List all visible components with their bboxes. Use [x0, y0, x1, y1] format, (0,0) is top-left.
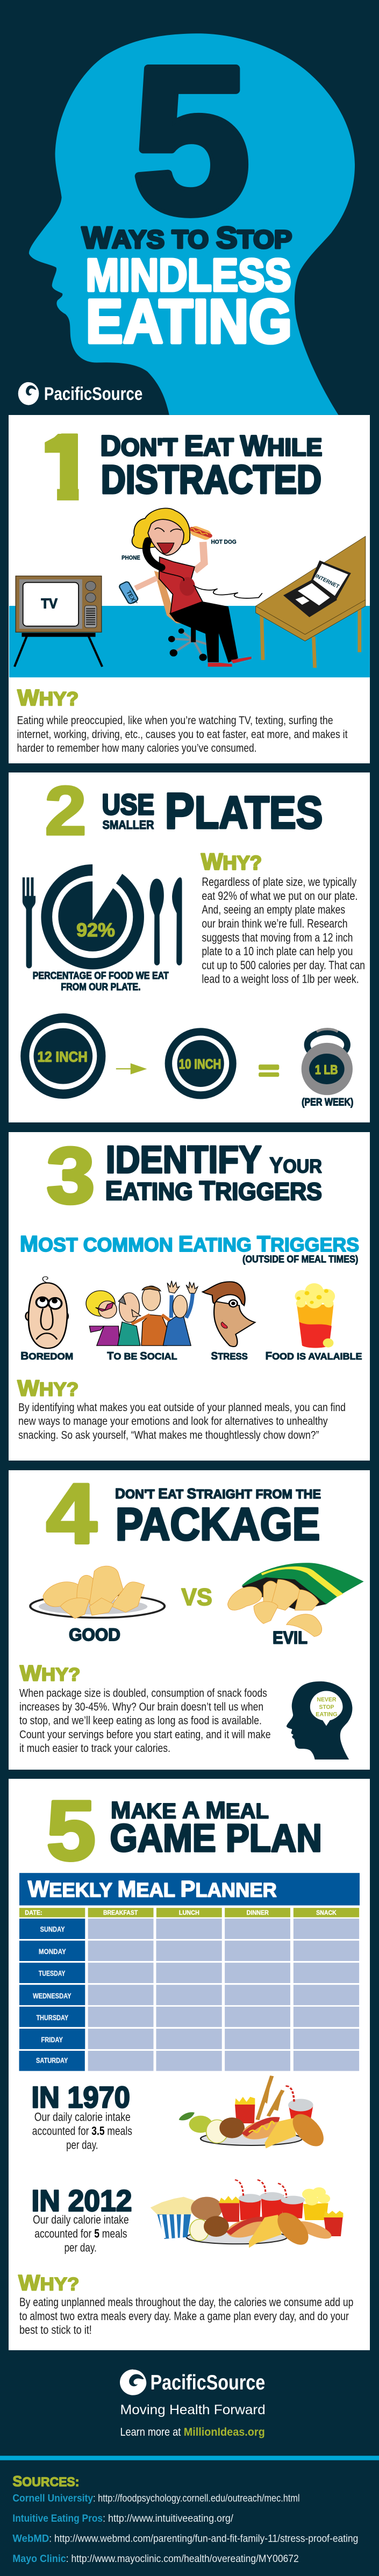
why heading: WHY?: [20, 1662, 80, 1686]
icon: spoon: [149, 878, 164, 965]
sources list: Cornell University: [12, 2492, 93, 2504]
chart caption: PERCENTAGE OF FOOD WE EAT: [33, 970, 169, 981]
plate: 12 inch: 12 INCH: [38, 1049, 88, 1065]
icon: stressed face: [203, 1282, 255, 1347]
panel background: [9, 1779, 370, 2350]
heading: in 1970: IN 1970: [31, 2081, 130, 2114]
heading: use smaller: USE: [102, 789, 154, 821]
explanatory text: to stop, and we’ll keep eating as long as food is available.: [19, 1714, 262, 1727]
illustration: 1970 food plate: [179, 2076, 330, 2150]
phone cord: [160, 571, 262, 598]
text: 1970 calories: per day.: [66, 2138, 98, 2151]
chair: [154, 571, 219, 626]
icon: small head with thought: NEVER: [317, 1697, 337, 1703]
planner column headers: BREAKFAST: [103, 1909, 138, 1916]
heading: identify your: IDENTIFY: [106, 1139, 261, 1181]
chart: plate showing 92 percent: 92%: [76, 920, 115, 941]
heading: don't eat straight from the: DON'T EAT STRAIGHT FROM THE: [115, 1486, 321, 1502]
sources list: : http://www.intuitiveeating.org/: [103, 2512, 233, 2524]
why heading: WHY?: [17, 686, 78, 711]
arrow: [116, 1063, 147, 1075]
step number 1: 1: [34, 414, 98, 520]
pants: [169, 602, 238, 663]
panel background: [9, 415, 370, 763]
head silhouette: [29, 33, 355, 415]
icon: knife: [172, 877, 182, 965]
big number 5: 5: [132, 23, 250, 256]
learn more link: Learn more at: [120, 2425, 181, 2438]
tagline: Moving Health Forward: [120, 2402, 266, 2417]
hot dog: [188, 524, 214, 542]
planner column headers: LUNCH: [179, 1909, 199, 1916]
explanatory text: Count your servings before you start eating, and it will make: [19, 1728, 271, 1741]
planner column headers: DATE:: [25, 1909, 42, 1916]
heading: identify your: YOUR: [269, 1154, 322, 1178]
text: 2012 calories: accounted for 5 meals: [34, 2227, 127, 2241]
label: hot dog: HOT DOG: [211, 539, 237, 545]
sources list: Intuitive Eating Pros: [12, 2512, 103, 2524]
hair: [132, 508, 190, 548]
PacificSource logo: [120, 2369, 265, 2395]
planner day column: THURSDAY: [36, 2014, 68, 2022]
planner column headers: SNACK: [316, 1909, 337, 1916]
explanatory text: [17, 714, 348, 754]
label: internet: INTERNET: [314, 574, 340, 590]
planner day column: FRIDAY: [41, 2036, 63, 2044]
trigger labels: BOREDOM: [20, 1350, 73, 1362]
learn more link: [120, 2425, 265, 2438]
heading: eating triggers: EATING TRIGGERS: [105, 1175, 322, 1206]
step number 1: [45, 433, 78, 500]
icon: smartphone: TEXT: [125, 590, 138, 606]
planner day column: SUNDAY: [40, 1925, 65, 1934]
illustration: desk and laptop: [256, 536, 366, 668]
planner empty cells: [88, 1919, 359, 2071]
planner day column: TUESDAY: [39, 1969, 66, 1978]
text: 1970 calories: Our daily calorie intake: [34, 2110, 131, 2124]
heading: use smaller: [102, 789, 154, 832]
panel 2: use smaller plates: [9, 772, 370, 1122]
heading: package: PACKAGE: [116, 1498, 320, 1550]
title line: ways to stop: WAYS TO STOP: [82, 221, 292, 255]
step number 2: 2: [45, 772, 87, 850]
label: good: GOOD: [69, 1626, 120, 1645]
telephone handset: [146, 541, 161, 568]
explanatory text: [19, 1686, 271, 1754]
panel 3: identify your eating triggers: [9, 1131, 370, 1461]
sources list: Mayo Clinic: [12, 2552, 66, 2564]
icon: smartphone: [118, 581, 140, 606]
explanatory text: And, seeing an empty plate makes: [202, 903, 345, 917]
trigger labels: [20, 1350, 362, 1362]
heading: use smaller: SMALLER: [103, 818, 154, 832]
explanatory text: [202, 875, 365, 986]
icon: social group: [86, 1281, 198, 1346]
explanatory text: best to stick to it!: [19, 2323, 92, 2337]
trigger labels: TO BE SOCIAL: [107, 1350, 177, 1362]
sources list: [12, 2492, 358, 2564]
floor band: [9, 606, 370, 677]
explanatory text: increases by 30-45%. Why? Our brain doesn’t tell us when: [19, 1700, 263, 1713]
plate: 10 inch: [165, 1028, 237, 1099]
illustration: woman multitasking: [118, 508, 262, 667]
label: phone: PHONE: [121, 555, 140, 561]
planner day column: WEDNESDAY: [33, 1992, 71, 2000]
planner title bar: WEEKLY MEAL PLANNER: [28, 1876, 277, 1902]
why heading: WHY?: [17, 1376, 78, 1401]
heading: plates: PLATES: [165, 782, 323, 839]
icon: bored face: [26, 1277, 68, 1348]
illustration: 2012 food plates: [151, 2180, 343, 2249]
panel background: [9, 772, 370, 1122]
heading: make a meal: MAKE A MEAL: [111, 1797, 269, 1823]
text: 1970 calories: accounted for 3.5 meals: [32, 2124, 132, 2138]
torso: [159, 557, 203, 614]
icon: fork: [23, 877, 35, 968]
explanatory text: it much easier to track your calories.: [19, 1742, 170, 1754]
title line: eating: EATING: [86, 287, 292, 356]
chart caption: [33, 970, 169, 992]
step number 4: 4: [46, 1465, 97, 1561]
subheading: most common eating triggers: MOST COMMON EATING TRIGGERS: [20, 1231, 359, 1256]
panel 4: don't eat straight from the package: [9, 1465, 370, 1770]
panel background: [9, 1470, 370, 1770]
planner day column: MONDAY: [39, 1948, 66, 1956]
PacificSource logo: [18, 382, 142, 405]
label: per week: (PER WEEK): [302, 1097, 353, 1108]
divider stripe: [0, 2456, 379, 2460]
icon: kettlebell one pound: [302, 1029, 353, 1095]
explanatory text: [18, 1401, 346, 1441]
explanatory text: When package size is doubled, consumption of snack foods: [19, 1686, 267, 1699]
icon: small head with thought: EATING: [316, 1711, 338, 1718]
explanatory text: harder to remember how many calories you’ve consumed.: [17, 741, 256, 754]
sources list: WebMD: [12, 2532, 49, 2544]
plate: 12 inch: [20, 1013, 105, 1099]
text: 2012 calories: Our daily calorie intake: [33, 2213, 129, 2227]
text: 2012 calories: [33, 2213, 129, 2255]
text: 1970 calories: [32, 2110, 132, 2151]
step number 3: 3: [47, 1131, 95, 1220]
planner column headers: [19, 1908, 359, 1917]
step number 5: 5: [46, 1784, 96, 1878]
heading: in 2012: IN 2012: [31, 2184, 132, 2218]
planner day column: [19, 1919, 85, 2071]
panel 5: make a meal game plan: [9, 1779, 370, 2350]
label: evil: EVIL: [273, 1628, 308, 1648]
plate: 10 inch: 10 INCH: [179, 1057, 221, 1072]
explanatory text: our brain think we’re full. Research: [202, 917, 348, 930]
header: [18, 23, 355, 415]
planner column headers: DINNER: [247, 1909, 269, 1916]
table: weekly meal planner: [19, 1873, 360, 2071]
icon: small head with thought: [287, 1681, 352, 1759]
panel 1: don't eat while distracted: [9, 414, 370, 763]
footer: [0, 2369, 379, 2564]
trigger labels: FOOD IS AVALAIBLE: [266, 1350, 362, 1362]
why heading: WHY?: [201, 849, 262, 875]
face: [148, 519, 184, 555]
chart: plate showing 92 percent: [41, 857, 144, 969]
sources heading: SOURCES:: [12, 2473, 79, 2490]
icon: television: [15, 576, 102, 667]
PacificSource logo: PacificSource: [151, 2371, 265, 2394]
planner day column: SATURDAY: [36, 2056, 68, 2065]
shoes: [208, 657, 252, 667]
icon: popcorn: [295, 1283, 335, 1348]
explanatory text: [19, 2295, 353, 2337]
illustration: chips on plate: [30, 1566, 165, 1619]
chart caption: FROM OUR PLATE.: [61, 981, 141, 992]
heading line 2: DISTRACTED: [101, 457, 321, 502]
text: 2012 calories: per day.: [65, 2241, 97, 2255]
arms: [135, 578, 157, 588]
learn more link: MillionIdeas.org: [184, 2425, 265, 2438]
PacificSource logo: PacificSource: [44, 383, 142, 404]
trigger labels: STRESS: [211, 1350, 248, 1362]
icon: small head with thought: STOP: [319, 1704, 334, 1711]
icon: kettlebell one pound: 1 LB: [315, 1063, 338, 1077]
panel background: [9, 1132, 370, 1461]
equals sign: [259, 1064, 279, 1077]
why heading: WHY?: [18, 2271, 79, 2295]
title line: mindless: MINDLESS: [86, 249, 291, 301]
heading line 1: DON'T EAT WHILE: [101, 430, 322, 462]
illustration: chips bag: [228, 1563, 364, 1637]
vs label: VS: [181, 1584, 212, 1611]
icon: television: TV: [41, 596, 58, 611]
planner title bar: [19, 1873, 360, 1906]
